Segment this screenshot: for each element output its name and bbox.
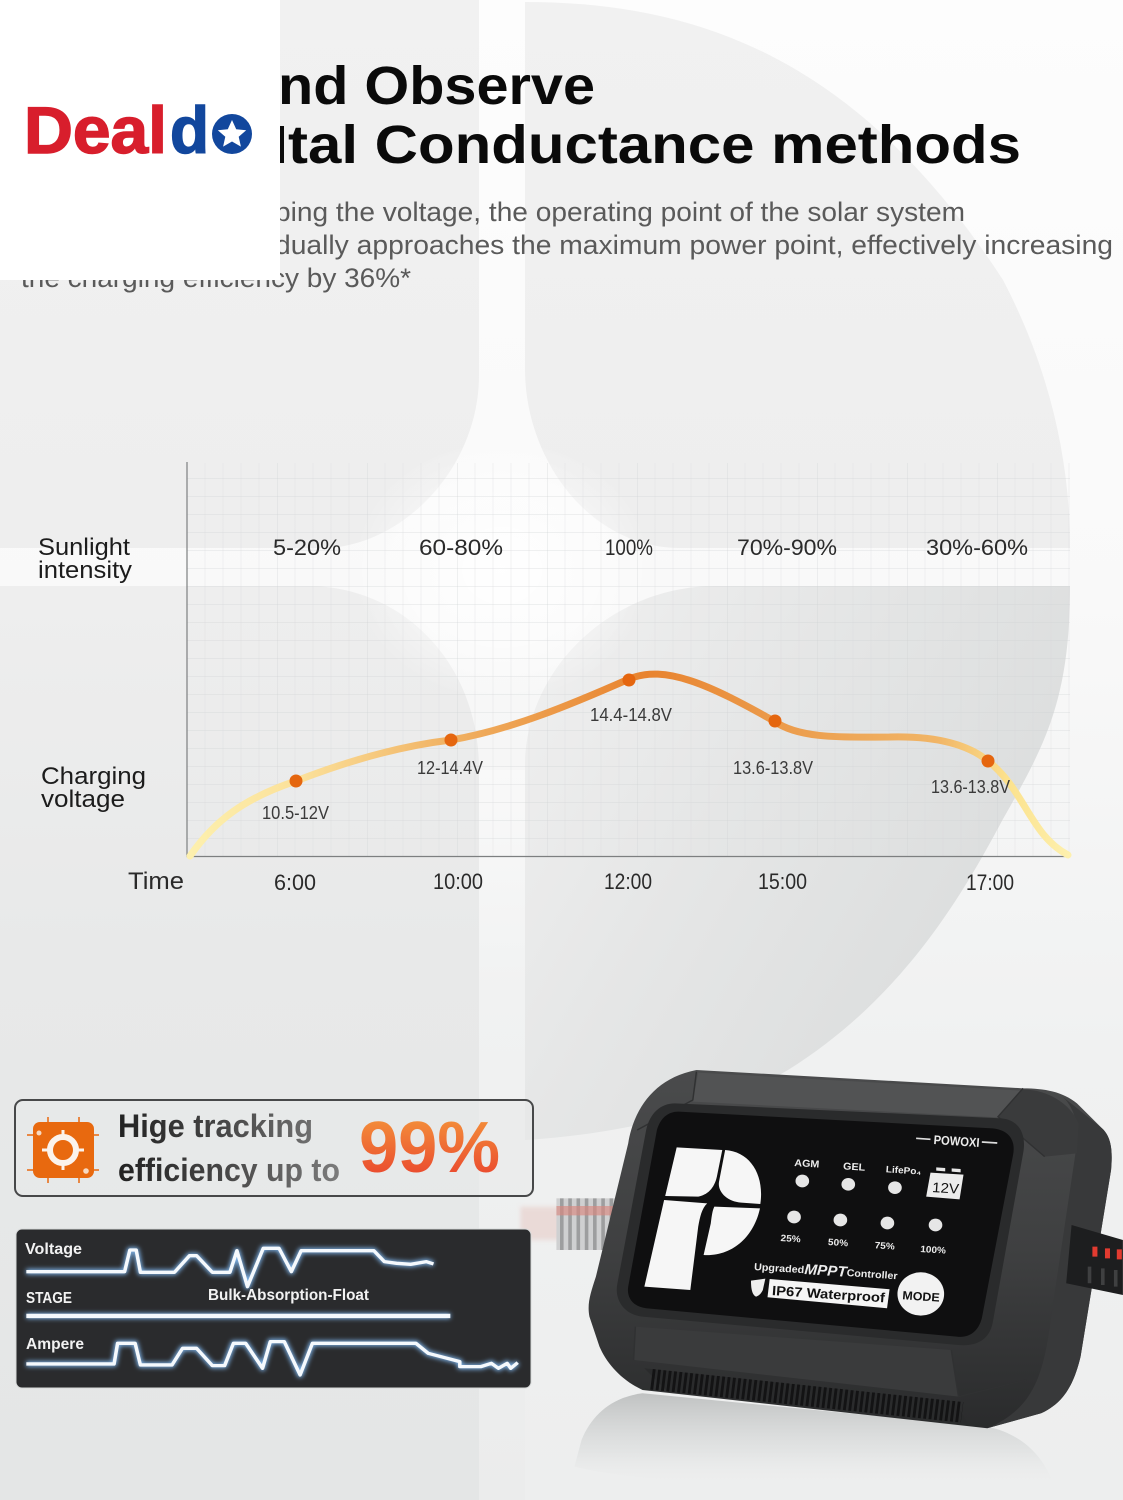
row label: charging voltage [41, 763, 146, 813]
12V battery badge [926, 1167, 964, 1199]
row label: charging voltage: Charging [41, 763, 146, 790]
waveform labels: Bulk-Absorption-Float [208, 1287, 370, 1304]
12V battery badge: 12V [932, 1180, 960, 1198]
panel labels: 100% [920, 1244, 947, 1257]
intro paragraph: dually approaches the maximum power point, effectively increasing [275, 230, 1113, 260]
title [278, 56, 1021, 175]
callout text: efficiency up to [118, 1152, 340, 1188]
panel labels: Controller [846, 1268, 898, 1282]
logo: Dealdo on white patch: d [170, 93, 209, 167]
logo: Dealdo on white patch: Deal [24, 93, 167, 167]
time axis labels [128, 868, 1014, 895]
waveform labels [25, 1241, 370, 1353]
time axis labels: 6:00 [274, 870, 316, 895]
icon: orange target chip [27, 1117, 99, 1183]
product: MPPT controller [574, 1070, 1123, 1488]
waveform traces [26, 1248, 518, 1375]
top band highlight [693, 1073, 1021, 1117]
callout: tracking efficiency [15, 1100, 533, 1196]
title: tal Conductance methods [288, 115, 1021, 175]
LEDs [787, 1175, 942, 1231]
intro paragraph: ping the voltage, the operating point of the solar system [275, 197, 965, 227]
row label: charging voltage: voltage [41, 786, 125, 813]
bumper seams [634, 1072, 1045, 1397]
panel labels [754, 1132, 980, 1282]
device body [589, 1070, 1112, 1428]
panel labels: POWOXI [933, 1132, 980, 1150]
time axis labels: Time [128, 868, 184, 895]
sunlight values: 60-80% [419, 535, 503, 560]
sunlight values: 70%-90% [737, 535, 837, 560]
IP67 waterproof badge [751, 1279, 890, 1308]
sunlight values [273, 535, 1028, 560]
intro paragraph [21, 197, 1113, 293]
waveform labels: Ampere [26, 1336, 84, 1353]
sunlight values: 5-20% [273, 535, 341, 560]
panel labels: MPPT [804, 1262, 849, 1281]
IP67 waterproof badge: IP67 Waterproof [772, 1282, 886, 1305]
title: nd Observe [278, 56, 595, 116]
time axis labels: 12:00 [604, 869, 652, 894]
voltage labels: 12-14.4V [417, 758, 483, 778]
MODE button: MODE [902, 1289, 940, 1305]
voltage labels: 14.4-14.8V [590, 705, 672, 725]
reflection [574, 1393, 1052, 1488]
logo: Dealdo on white patch [0, 0, 280, 280]
left cable [521, 1198, 621, 1250]
voltage labels: 13.6-13.8V [931, 777, 1010, 797]
time axis labels: 17:00 [966, 870, 1014, 895]
big number 99%: 99% [359, 1108, 500, 1188]
panel labels: 25% [780, 1233, 801, 1245]
voltage labels [262, 705, 1010, 823]
black control panel [628, 1112, 1014, 1337]
intro paragraph: the charging efficiency by 36%* [21, 263, 412, 293]
voltage labels: 10.5-12V [262, 803, 329, 823]
panel labels: AGM [794, 1158, 820, 1170]
sunlight values: 30%-60% [926, 535, 1028, 560]
lower bumper band [634, 1327, 958, 1397]
time axis labels: 15:00 [758, 869, 807, 894]
voltage labels: 13.6-13.8V [733, 758, 813, 778]
Powoxi rules [916, 1138, 997, 1143]
voltage curve [190, 674, 1068, 856]
panel labels: LifePo₄ [885, 1165, 922, 1178]
panel labels: 75% [874, 1241, 896, 1253]
row label: sunlight intensity: Sunlight [38, 534, 130, 561]
right bumper corner [998, 1089, 1079, 1157]
row label: sunlight intensity: intensity [38, 557, 132, 584]
chart: sunlight and charging voltage over time [38, 462, 1070, 895]
chart grid [187, 463, 1070, 856]
waveform labels: STAGE [26, 1290, 72, 1307]
vent slots [644, 1368, 967, 1423]
right cable connector [1066, 1225, 1123, 1295]
callout text: Hige tracking [118, 1108, 313, 1144]
face bezel [617, 1103, 1024, 1345]
P logo [644, 1147, 761, 1290]
side shading [987, 1097, 1112, 1428]
MODE button [897, 1272, 944, 1316]
panel labels: GEL [843, 1162, 866, 1174]
callout text [118, 1108, 340, 1188]
curve data points [290, 674, 994, 788]
panel: waveform display [16, 1229, 531, 1388]
panel labels: Upgraded [754, 1262, 805, 1276]
sunlight values: 100% [605, 535, 653, 560]
time axis labels: 10:00 [433, 869, 483, 894]
panel labels: 50% [828, 1237, 849, 1249]
chart axes [187, 462, 1066, 856]
row label: sunlight intensity [38, 534, 132, 584]
waveform labels: Voltage [25, 1241, 82, 1258]
